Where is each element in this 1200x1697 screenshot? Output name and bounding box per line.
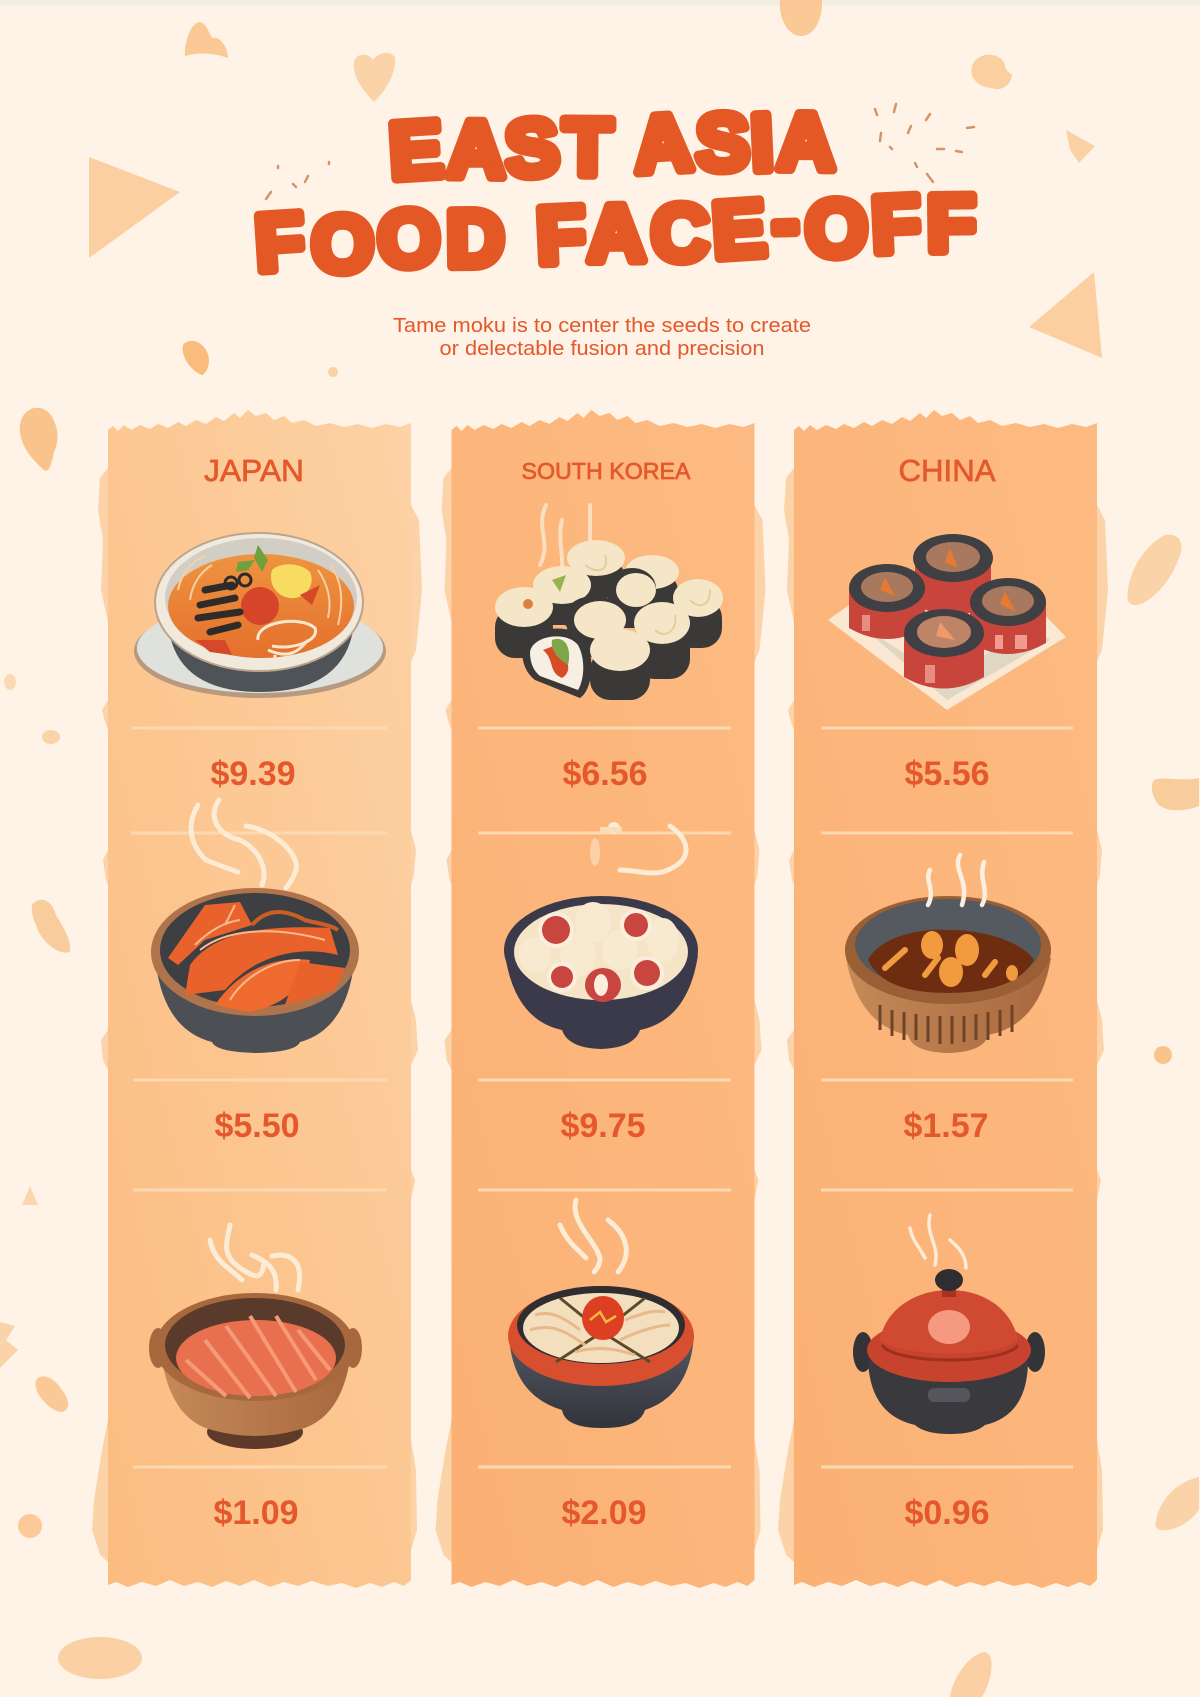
price: $1.57 [903,1107,989,1145]
title: EAST ASIA [387,93,840,198]
icon: clay bowl with sliced meat [149,1225,362,1449]
title: FOOD FACE-OFF [252,170,983,292]
price: $5.50 [214,1107,300,1145]
decorative sparks left of title [266,162,329,199]
heading: Japan: JAPAN [204,453,304,488]
price: $2.09 [561,1494,647,1532]
heading: China: CHINA [898,453,996,488]
panel: China column [778,410,1108,1588]
icon: rice ball bowl [504,822,698,1049]
price: $9.75 [560,1107,646,1145]
price: $6.56 [562,755,648,793]
title [252,93,983,292]
price: $9.39 [210,755,296,793]
subtitle [393,315,811,360]
icon: noodle soup bowl on plate [134,533,386,698]
panel: Japan column [92,410,422,1588]
decorative sparks right of title [875,104,974,182]
icon: red rolls on square plate [828,534,1066,710]
icon: sushi rolls [495,505,723,700]
price: $0.96 [904,1494,990,1532]
icon: ribbed clay bowl with stew [845,855,1051,1053]
price: $1.09 [213,1494,299,1532]
panel: South Korea column [436,410,766,1588]
icon: tofu and egg hot pot [508,1200,694,1428]
subtitle: Tame moku is to center the seeds to create [393,315,811,337]
subtitle: or delectable fusion and precision [440,338,764,360]
icon: kimchi bowl with steam [151,800,359,1053]
heading: South Korea: SOUTH KOREA [522,458,691,484]
icon: lidded clay pot with steam [853,1215,1045,1434]
price: $5.56 [904,755,990,793]
